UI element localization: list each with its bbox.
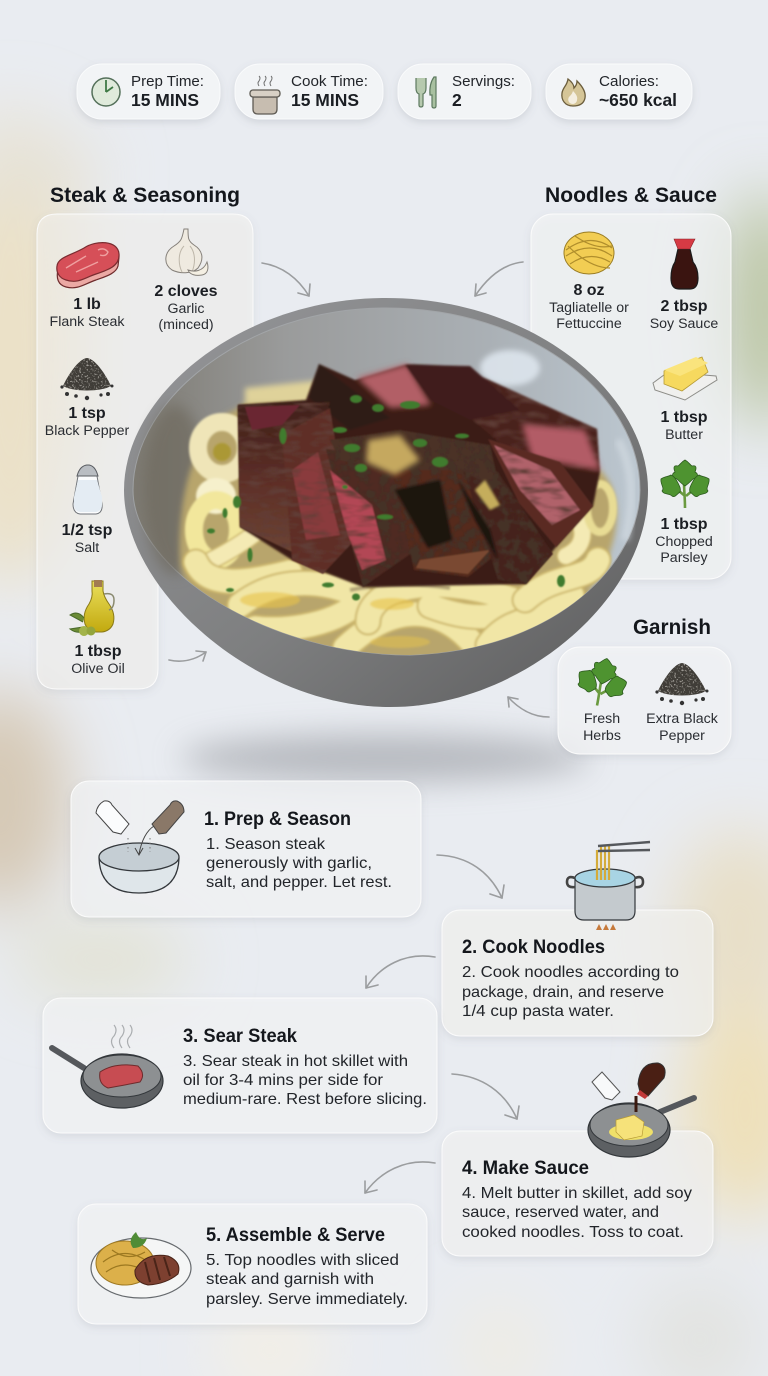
ingredient: salt: Salt [75, 540, 99, 556]
main dish: steak and noodles bowl [124, 298, 648, 707]
arrow: noodles to bowl [475, 262, 523, 296]
step 5 text: steak and garnish with [206, 1271, 374, 1288]
slice 3 [326, 449, 416, 587]
panel: garnish [558, 647, 731, 754]
ingredient: olive oil: 1 tbsp [74, 643, 122, 660]
pasta ribbons, left [194, 422, 290, 581]
step 3 text: oil for 3-4 mins per side for [183, 1072, 384, 1089]
ingredient: flank steak: Flank Steak [50, 314, 125, 330]
icon: noodle pot [567, 842, 650, 930]
ingredient: tagliatelle: Fettuccine [556, 316, 622, 332]
step 3 text [183, 1026, 427, 1108]
slice 6 [488, 439, 593, 547]
heading: noodles and sauce: Noodles & Sauce [545, 184, 717, 207]
step 3 text: 3. Sear Steak [183, 1026, 297, 1047]
icon: shakers and bowl [96, 801, 184, 893]
stat: servings [398, 64, 531, 119]
step 5 text: parsley. Serve immediately. [206, 1291, 408, 1308]
step 3 text: medium-rare. Rest before slicing. [183, 1091, 427, 1108]
stat: servings: Servings: [452, 73, 515, 90]
slice 4 [398, 470, 491, 577]
ingredient: flank steak: 1 lb [73, 296, 101, 313]
ingredient: tagliatelle: Tagliatelle or [549, 300, 629, 316]
ingredient: flank steak [50, 243, 125, 330]
step 4 text: cooked noodles. Toss to coat. [462, 1224, 684, 1241]
step 1 text: salt, and pepper. Let rest. [206, 874, 392, 891]
garnish: extra black pepper: Extra Black [646, 711, 719, 727]
step 2 text: 1/4 cup pasta water. [462, 1003, 614, 1020]
ingredient: butter [653, 357, 717, 443]
stat: cook time [235, 64, 383, 119]
ingredient: garlic: Garlic [167, 301, 205, 317]
step 4 text: 4. Make Sauce [462, 1158, 589, 1179]
step 1 panel [71, 781, 421, 917]
step 3 text: 3. Sear steak in hot skillet with [183, 1053, 408, 1070]
steak mass and back slices [238, 364, 600, 587]
step 2 text: 2. Cook Noodles [462, 937, 605, 958]
step 4 panel [442, 1063, 713, 1256]
icon: plated steak and noodles [91, 1232, 191, 1298]
stat: calories: ~650 kcal [599, 90, 677, 110]
stat: servings: 2 [452, 90, 462, 110]
garnish: fresh herbs: Fresh [584, 711, 620, 727]
icon: sauce pan [588, 1063, 694, 1157]
seasoning on top [330, 430, 500, 490]
ingredient: salt: 1/2 tsp [62, 522, 113, 539]
step 4 text: 4. Melt butter in skillet, add soy [462, 1185, 692, 1202]
step 2 panel [442, 842, 713, 1036]
arrow: garnish to bowl [508, 697, 549, 717]
bowl shadow [180, 734, 590, 782]
panel: noodles and sauce [531, 214, 731, 579]
step 5 panel [78, 1204, 427, 1324]
arrow: step 1 to step 2 [437, 855, 504, 898]
ingredient: butter: Butter [665, 427, 703, 443]
ingredient: tagliatelle [549, 232, 629, 332]
ingredient: parsley [655, 460, 713, 566]
stat: calories [546, 64, 692, 119]
ingredient: parsley: 1 tbsp [660, 516, 708, 533]
ingredient: olive oil: Olive Oil [71, 661, 125, 677]
stat: cook time: Cook Time: [291, 73, 368, 90]
ingredient: garlic: 2 cloves [154, 283, 218, 300]
step 2 text: 2. Cook noodles according to [462, 964, 679, 981]
garnish: fresh herbs [573, 654, 631, 744]
step 5 text: 5. Top noodles with sliced [206, 1252, 399, 1269]
pasta ribbons, bottom and right [240, 484, 613, 650]
ingredient: soy sauce [650, 239, 718, 332]
ingredient: black pepper: Black Pepper [45, 423, 129, 439]
arrow: step 4 to step 5 [365, 1162, 435, 1193]
pasta underlay [179, 380, 616, 680]
step 3 panel [43, 998, 437, 1133]
food: pasta and steak [179, 364, 616, 680]
stat: prep time: Prep Time: [131, 73, 204, 90]
garnish: extra black pepper: Pepper [659, 728, 705, 744]
step 2 text: package, drain, and reserve [462, 984, 664, 1001]
arrow: step 2 to step 3 [366, 956, 435, 988]
step 1 text: 1. Prep & Season [204, 809, 351, 830]
ingredient: olive oil [70, 580, 125, 677]
ingredient: parsley: Chopped [655, 534, 713, 550]
ingredient: black pepper: 1 tsp [68, 405, 106, 422]
stat: prep time [77, 64, 220, 119]
step 4 text: sauce, reserved water, and [462, 1204, 659, 1221]
heading: steak and seasoning: Steak & Seasoning [50, 184, 240, 207]
step 1 text: 1. Season steak [206, 836, 326, 853]
arrow: step 3 to step 4 [452, 1074, 519, 1119]
ingredient: parsley: Parsley [660, 550, 709, 566]
stat: prep time: 15 MINS [131, 90, 199, 110]
ingredient: salt [62, 465, 113, 556]
ingredient: garlic: (minced) [158, 317, 214, 333]
ingredient: tagliatelle: 8 oz [573, 282, 605, 299]
icon: skillet with steak [52, 1025, 163, 1108]
step 2 text [462, 937, 679, 1020]
bowl interior [133, 308, 640, 655]
ingredient: garlic [154, 229, 218, 333]
ingredient: butter: 1 tbsp [660, 409, 708, 426]
ingredient: soy sauce: Soy Sauce [650, 316, 718, 332]
stat pills row [77, 64, 692, 119]
step 5 text: 5. Assemble & Serve [206, 1225, 385, 1246]
heading: garnish: Garnish [633, 616, 711, 639]
stat: calories: Calories: [599, 73, 659, 90]
slice 5 [464, 472, 554, 585]
step 5 text [206, 1225, 408, 1308]
ingredient: black pepper [45, 358, 129, 439]
stat: cook time: 15 MINS [291, 90, 359, 110]
ingredient: soy sauce: 2 tbsp [660, 298, 708, 315]
arrow: olive oil to bowl [169, 651, 206, 661]
step 1 text [204, 809, 392, 891]
step 1 text: generously with garlic, [206, 855, 372, 872]
garnish: fresh herbs: Herbs [583, 728, 621, 744]
panel: steak and seasoning [37, 214, 253, 689]
slice 1 [238, 402, 330, 552]
slice 2 [282, 408, 352, 574]
step 4 text [462, 1158, 692, 1241]
garnish: extra black pepper [646, 663, 719, 744]
front steak slices [207, 395, 593, 600]
bowl body [124, 298, 648, 707]
arrow: garlic to bowl [262, 263, 310, 296]
